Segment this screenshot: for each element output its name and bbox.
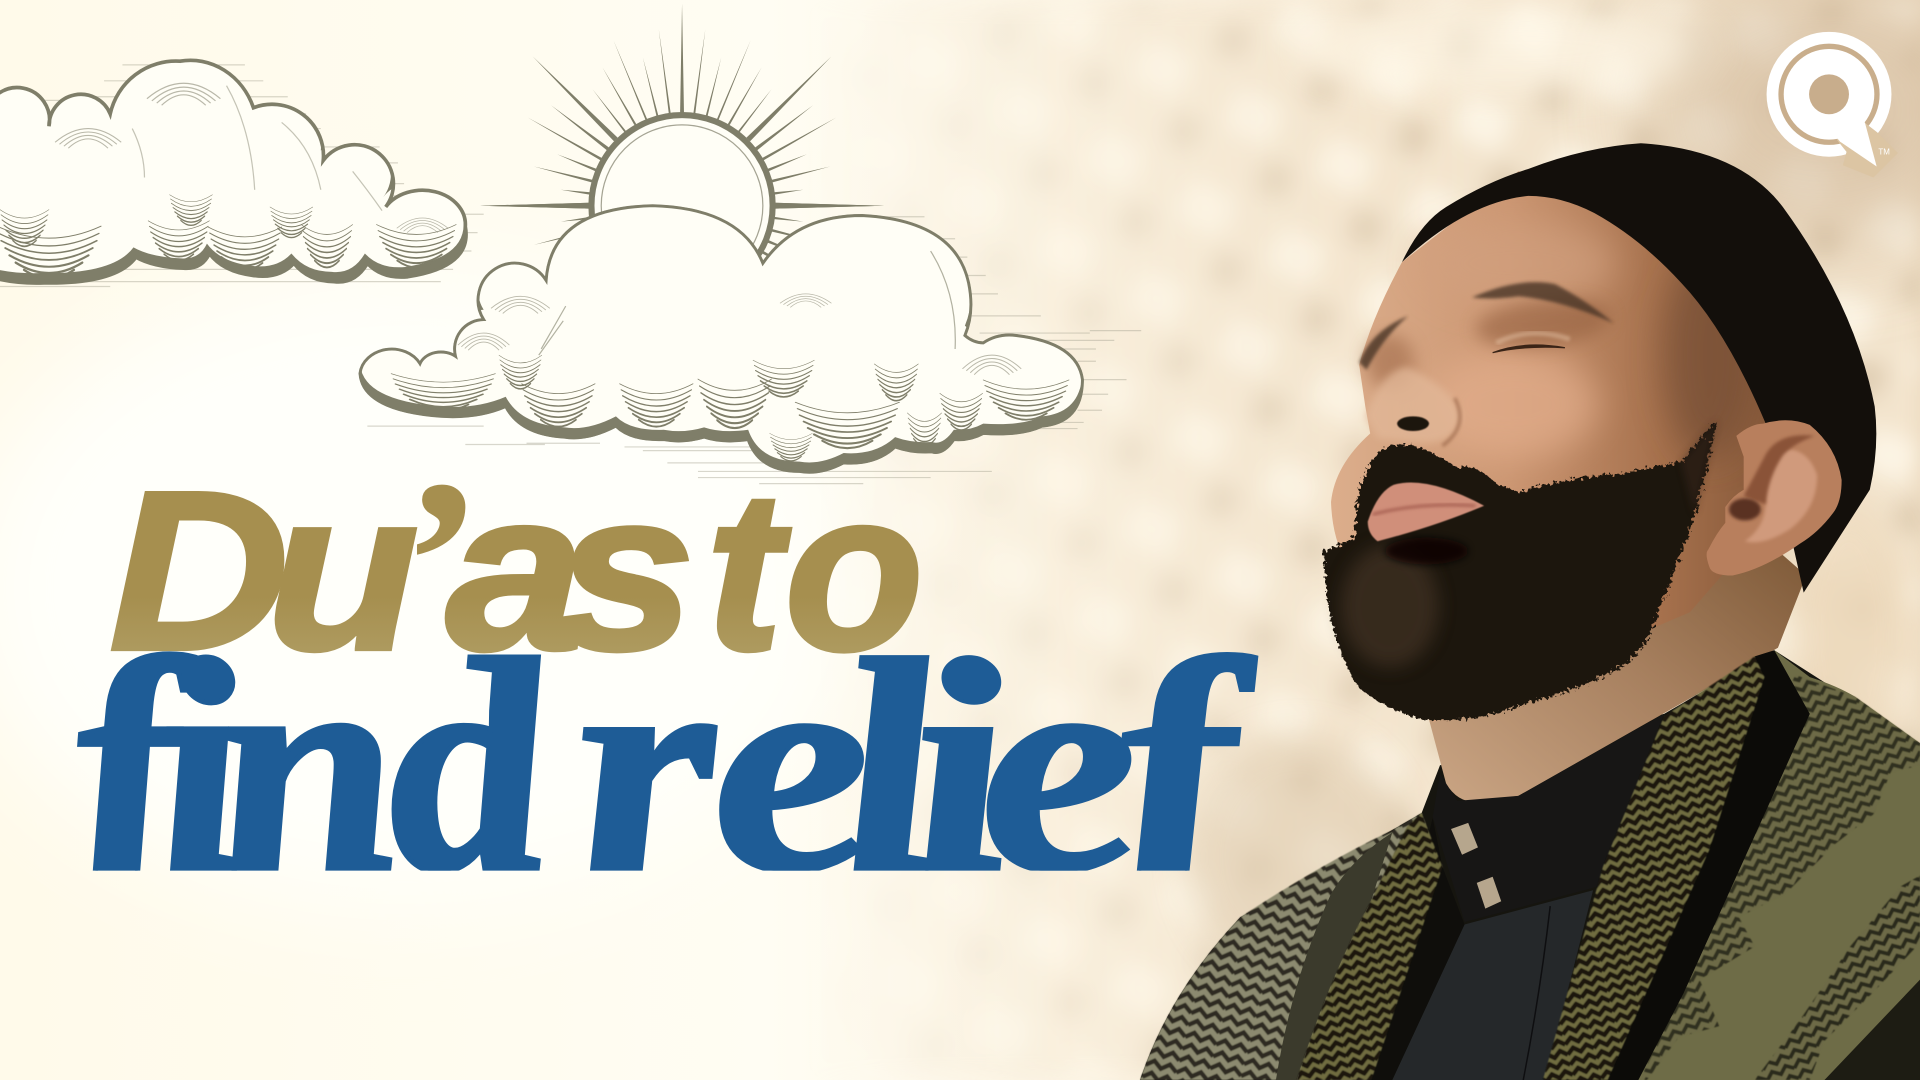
temple shadow [1662,251,1755,459]
horizontal engraving lines, right cloud [367,217,1141,484]
left eyebrow [1359,316,1408,370]
title word: Du'as: Du [109,444,419,697]
eyelid highlight [1496,333,1570,343]
sun rays [480,4,884,382]
beard highlight [1341,545,1439,667]
illustration: sun with rays [480,4,884,382]
wrap right olive panel [1592,650,1920,1080]
collar stud, upper [1451,823,1478,855]
wrap patterned shoulder band [1641,675,1920,1080]
person: beard and moustache [1324,420,1717,720]
illustration: left cloud [0,51,484,287]
person: scarf lapels [1297,650,1810,1080]
collar [1433,714,1664,922]
right eyebrow [1472,282,1614,323]
left lapel [1297,813,1442,1080]
collar stud, lower [1477,877,1501,909]
title word: to: to [707,445,923,698]
logo: speech-bubble Q [1767,32,1898,178]
cloud hatching, right cloud [391,251,1069,461]
wrap left shoulder [1140,813,1442,1080]
title word: relief: relief [556,597,1288,936]
person: neck [1427,490,1806,802]
person: garment dark backing [1140,650,1920,1080]
shadow below lip [1385,538,1468,564]
nose [1365,367,1461,443]
lips [1368,483,1484,541]
ear fold shadow [1744,435,1815,504]
cheek highlight [1427,349,1598,459]
closed eyelid [1493,345,1565,353]
cloud hatching, left cloud [0,83,456,278]
wrap bottom right shadow [1824,980,1920,1080]
title word: Du'as: ’ [389,432,474,690]
person: head and face [1331,171,1776,722]
sideburn fade [1681,420,1717,514]
sun disc [591,115,773,296]
ear inner bowl [1745,449,1817,542]
right lapel pattern [1543,656,1764,1080]
title: Du'as to [109,432,923,698]
wrap lower zigzag band [1755,876,1920,1080]
forehead highlight [1420,220,1616,306]
person: olive wrap [1140,650,1920,1080]
nostril [1397,416,1429,431]
illustration: right cloud [360,196,1141,484]
mouth line [1373,505,1476,514]
right lapel black edge [1592,650,1810,1080]
dark band beside shirt [1369,818,1464,1080]
wrap left inner panel [1276,833,1392,1080]
nose wing shadow [1442,398,1460,446]
trademark mark: TM [1878,147,1890,156]
title: find relief [77,651,1258,871]
person: kufi cap [1402,143,1876,593]
eye socket shadow [1473,293,1612,353]
person: ear [1707,420,1842,576]
logo tail [1824,122,1877,167]
ear canal [1729,498,1761,520]
person: black shirt and collar [1369,714,1664,1080]
horizontal engraving lines, left cloud [0,65,484,287]
title word: Du'as: as [446,444,695,697]
background bokeh lights [924,0,1920,1074]
title word: find: find [55,598,569,937]
